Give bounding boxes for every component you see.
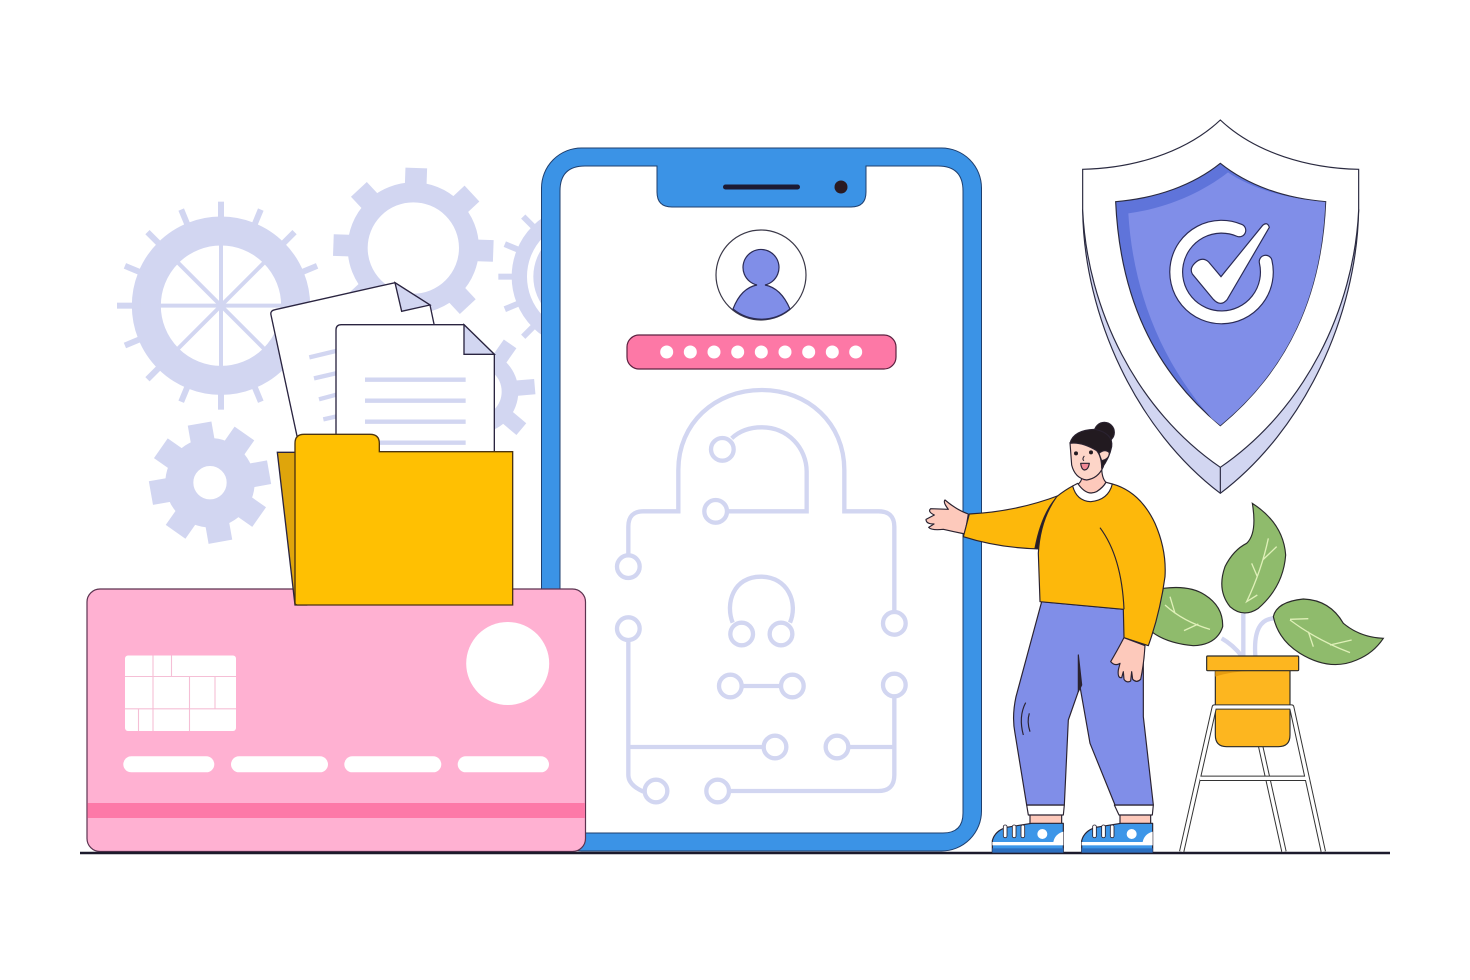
hair bun [1094, 422, 1114, 442]
magnetic stripe [88, 803, 585, 818]
right leaf [1273, 599, 1383, 665]
nose [1083, 456, 1084, 461]
left leaf [1152, 587, 1223, 646]
underarm shadow [1035, 497, 1057, 549]
woman presenting [926, 422, 1165, 853]
front document [336, 325, 494, 457]
potted plant on stool [1152, 503, 1383, 852]
ear [1099, 451, 1109, 461]
trouser cuffs [1027, 805, 1153, 815]
security shield [1083, 120, 1359, 493]
neck [1077, 467, 1106, 493]
shield white face [1083, 120, 1359, 467]
password field [627, 335, 896, 369]
smile [1081, 463, 1089, 470]
plant pot [1207, 656, 1299, 747]
hair [1070, 429, 1112, 468]
left sneaker [992, 823, 1063, 853]
chip [125, 656, 236, 731]
shield blue panel [1116, 163, 1326, 426]
pointing hand [926, 500, 968, 534]
documents and folder [271, 283, 513, 605]
card number bars [123, 756, 549, 772]
phone screen with notch [560, 166, 963, 833]
back document [271, 283, 437, 450]
plant stems [1222, 613, 1275, 656]
sweater body [1038, 484, 1165, 646]
card logo circle [466, 622, 549, 705]
circuit padlock [617, 390, 906, 802]
sweater collar [1073, 482, 1112, 502]
gear: behind documents [443, 339, 535, 435]
check badge [1176, 224, 1269, 317]
background gears [117, 168, 647, 544]
sweater arm [963, 495, 1060, 549]
gear: large spoked wheel [117, 202, 325, 410]
right sneaker [1082, 823, 1153, 853]
ankles [1030, 813, 1151, 825]
trousers [1014, 602, 1153, 805]
stool frame [1182, 707, 1323, 852]
shield blue highlight [1128, 172, 1325, 425]
ground line [80, 852, 1390, 854]
speaker [723, 184, 800, 190]
credit card [87, 589, 586, 852]
gear: small solid gear [149, 421, 271, 544]
folder front [295, 434, 513, 605]
top leaf [1222, 503, 1286, 613]
card body [87, 589, 586, 852]
user avatar [716, 230, 806, 320]
lower hand [1111, 638, 1145, 682]
gear: partly hidden behind phone [498, 213, 647, 341]
gear: top ring gear [333, 168, 494, 328]
phone body [542, 148, 982, 851]
smartphone [542, 148, 982, 851]
folder back flap [277, 452, 307, 605]
shield back edge [1083, 210, 1359, 493]
face [1070, 438, 1108, 480]
eyes [1074, 450, 1093, 455]
back stool leg [1260, 743, 1284, 852]
camera [834, 180, 848, 194]
